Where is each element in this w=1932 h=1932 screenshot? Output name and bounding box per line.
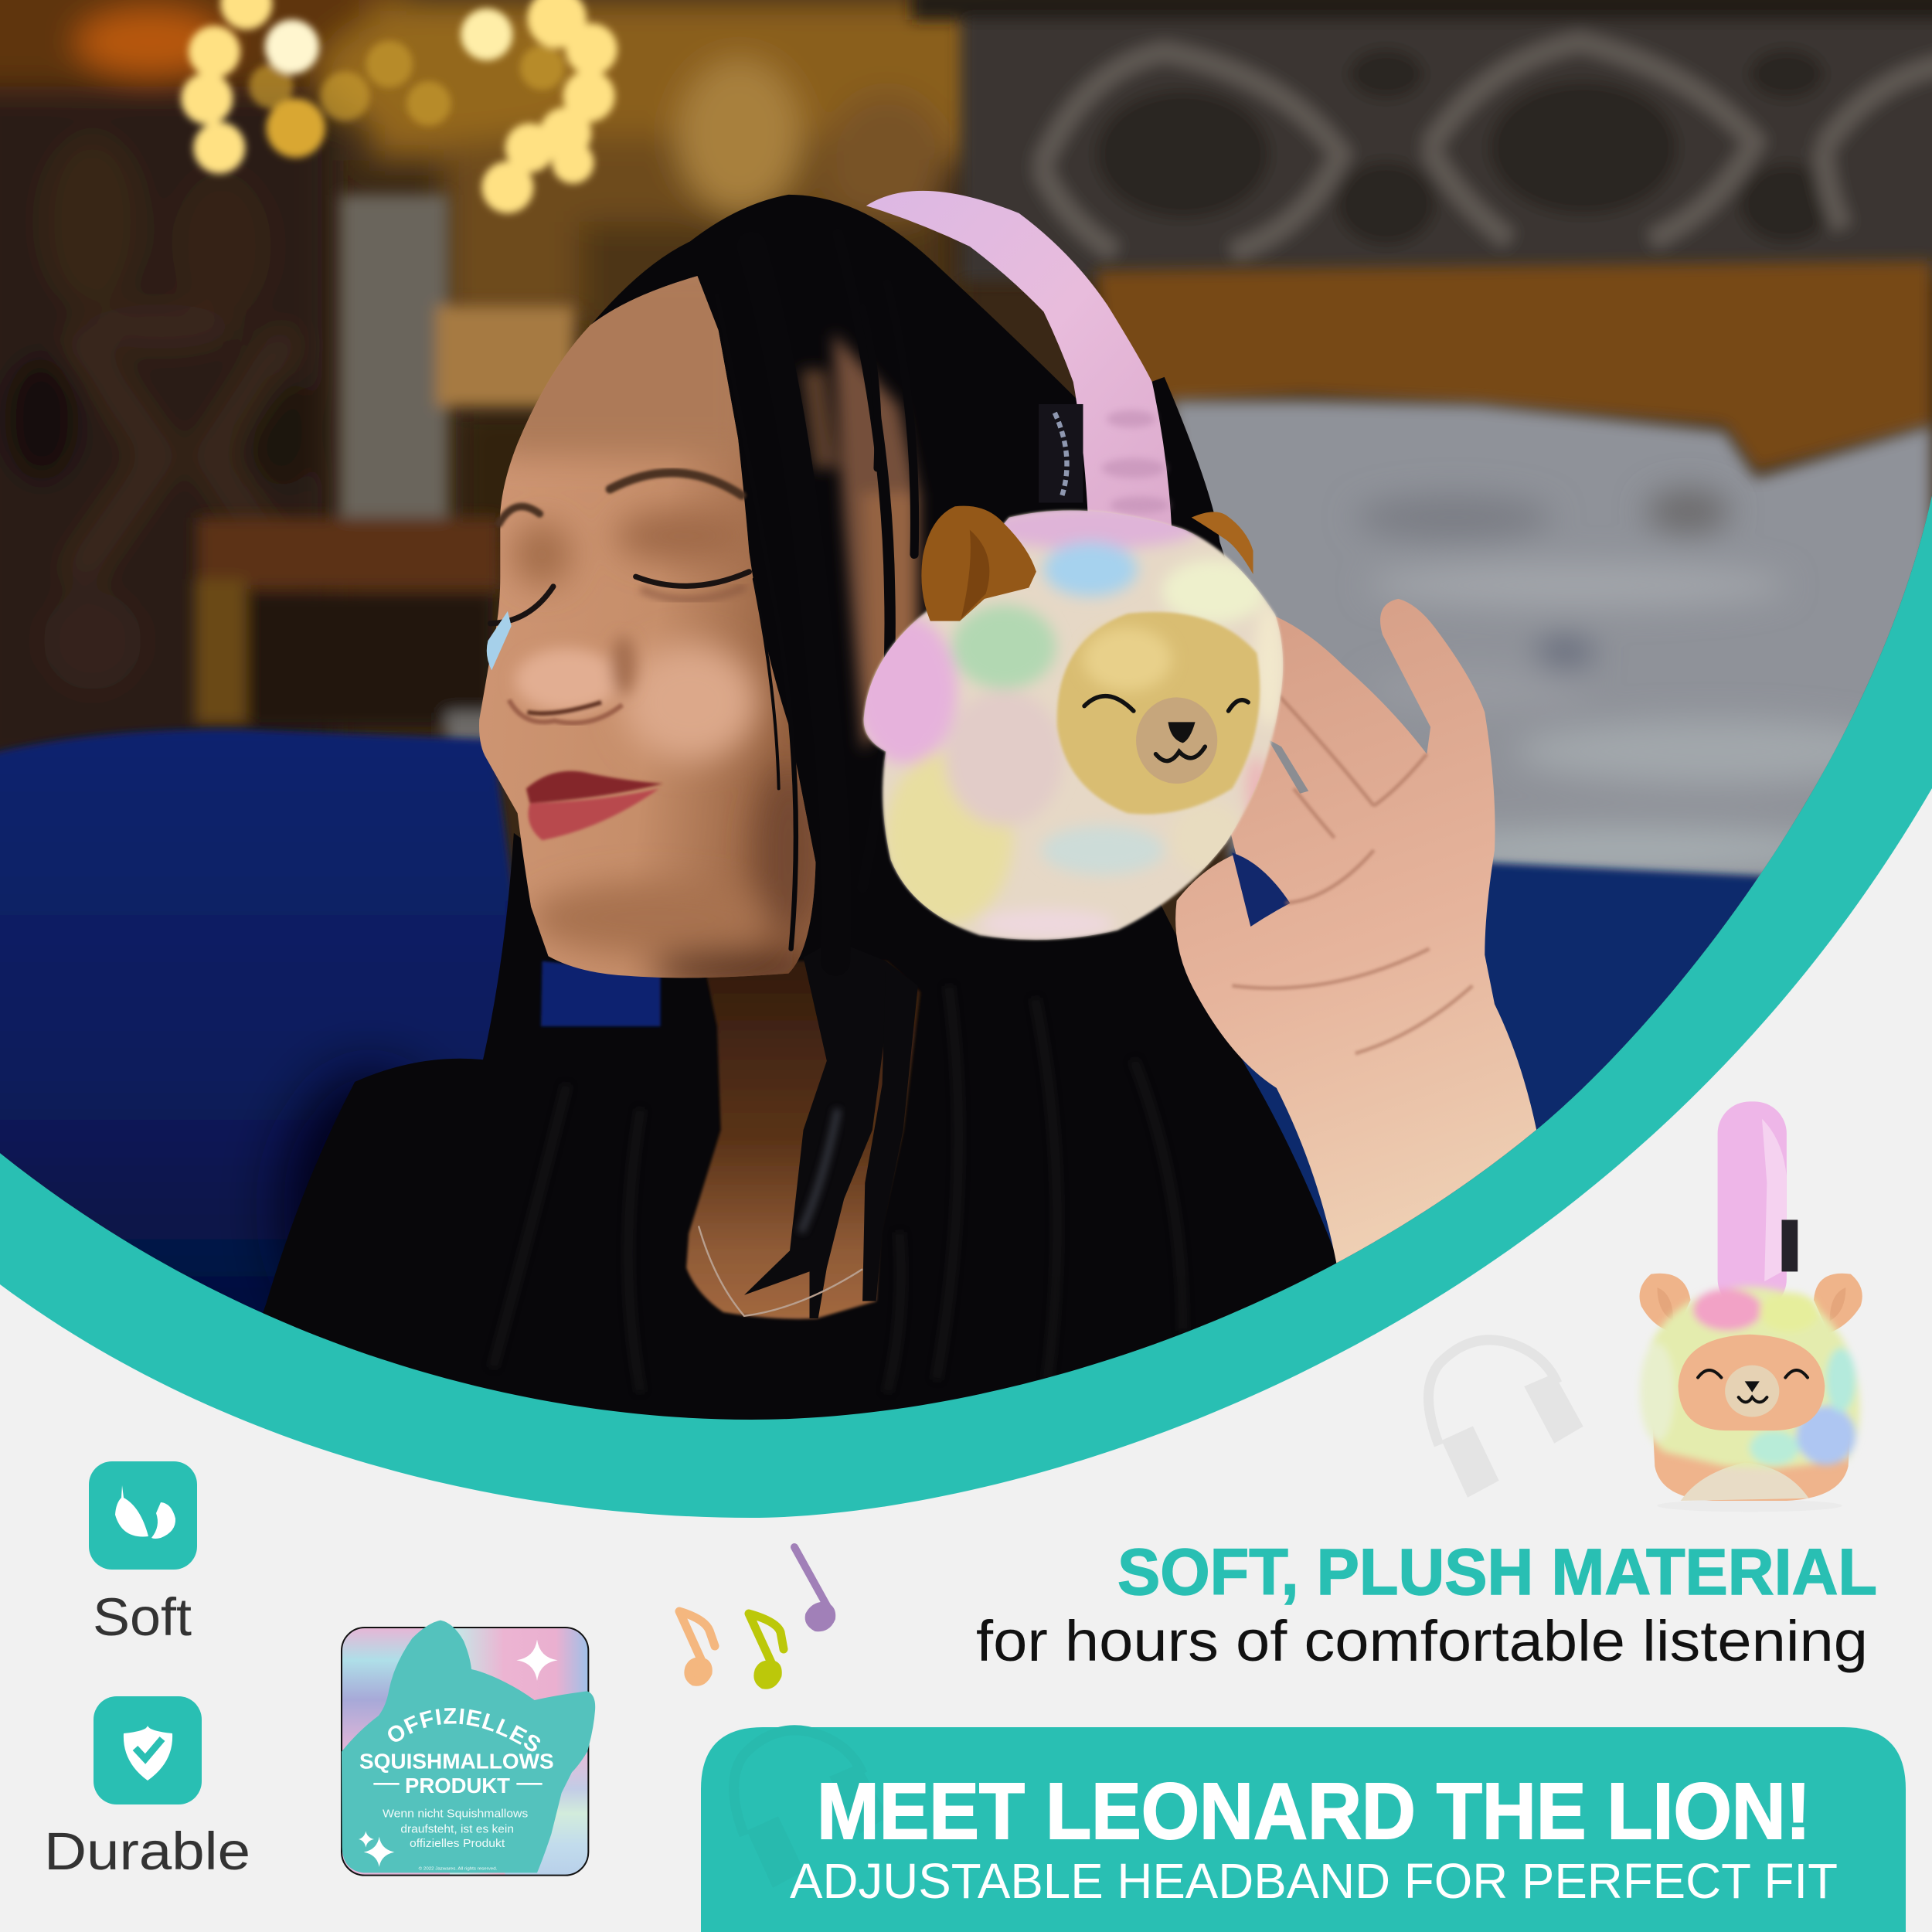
plush lion earmuff: [854, 505, 1284, 940]
hair wedge over neck: [744, 940, 886, 1318]
label: Soft: [93, 1587, 192, 1647]
face shading: [493, 259, 825, 985]
eyebrows: [499, 473, 742, 524]
banner: [701, 1727, 1906, 1932]
face shape: [479, 276, 815, 978]
lifestyle photo: woman wearing plush earmuffs: [0, 0, 1932, 1503]
sparkles: [359, 1640, 558, 1867]
fluffy mane: [864, 510, 1283, 940]
strands over face: [717, 296, 796, 949]
blue spot beside the nose: [487, 611, 512, 670]
woven tag: [1039, 404, 1083, 503]
banner title: MEET LEONARD THE LION!: [817, 1767, 1811, 1855]
cream belly: [1681, 1463, 1809, 1501]
lips: [526, 771, 663, 840]
official product badge: draufsteht, ist es kein: [400, 1824, 514, 1836]
blanket gap between thumb and fingers: [1232, 852, 1290, 927]
note: purple: [794, 1547, 832, 1628]
note: lime: [749, 1614, 784, 1685]
face features: [1698, 1370, 1808, 1402]
hand: [1175, 599, 1590, 1318]
skin behind hair strands: [801, 332, 918, 752]
yellow face: [1057, 612, 1260, 815]
nose: [515, 636, 636, 713]
banner subtitle: ADJUSTABLE HEADBAND FOR PERFECT FIT: [790, 1853, 1838, 1909]
badge rainbow card: [342, 1628, 590, 1876]
neck: [686, 940, 920, 1319]
badge text: [359, 1708, 554, 1798]
muzzle: [1725, 1366, 1779, 1417]
rainbow mane: [1640, 1287, 1859, 1469]
icon: feather tile: [89, 1461, 197, 1570]
feature: durable: [44, 1696, 250, 1881]
teal crescent behind photo: [0, 0, 1932, 1518]
closed eyes: [491, 572, 749, 624]
badge text: OFFIZIELLES: [388, 1708, 540, 1751]
blue gap under chin: [541, 961, 661, 1026]
feature: soft: [89, 1461, 197, 1647]
official product badge: offizielles Produkt: [410, 1838, 505, 1850]
badge silhouette: [342, 1621, 595, 1872]
music notes: [679, 1547, 832, 1685]
icon: shield: [124, 1726, 172, 1781]
blurred room background: [0, 0, 1932, 1380]
body: [1652, 1417, 1851, 1501]
official product badge: [341, 1620, 595, 1876]
muzzle: [1136, 697, 1217, 784]
subheading: for hours of comfortable listening: [976, 1609, 1868, 1673]
badge text: SQUISHMALLOWS: [359, 1749, 554, 1773]
tan face: [1679, 1335, 1825, 1430]
shadow: [1657, 1499, 1842, 1512]
blue blanket: [0, 730, 1787, 1380]
ghost headphones icon on background: [1428, 1340, 1581, 1495]
nostril line: [509, 700, 622, 723]
headboard: [1097, 261, 1932, 471]
pillows: [1171, 400, 1932, 887]
banner shape: [701, 1727, 1906, 1932]
pink headband: [1718, 1101, 1798, 1311]
heading: soft plush material: SOFT, PLUSH MATERIAL: [1117, 1536, 1877, 1608]
ears: [1640, 1274, 1862, 1333]
official product badge: Wenn nicht Squishmallows: [383, 1808, 528, 1821]
ghost headphones icon on banner: [734, 1730, 886, 1886]
face: [479, 259, 825, 985]
brown ears: [921, 506, 1253, 621]
badge text: PRODUKT: [405, 1774, 510, 1798]
wall damask: [912, 0, 1932, 281]
hair: [263, 195, 1338, 1420]
plush earmuff headband: [866, 191, 1172, 530]
note: orange: [679, 1611, 715, 1682]
finger gap: [1268, 740, 1308, 794]
face features: [1084, 696, 1248, 761]
necklace: [699, 1226, 862, 1316]
label: Durable: [44, 1821, 250, 1881]
icon: shield tile: [94, 1696, 202, 1804]
product cutout: Leonard lion earmuff: [1640, 1101, 1862, 1512]
lower hair sheen: [493, 986, 1183, 1393]
official product badge: © 2022 Jazwares. All rights reserved.: [419, 1866, 498, 1872]
bokeh lights: [181, 0, 617, 213]
icon: feather: [115, 1485, 175, 1539]
